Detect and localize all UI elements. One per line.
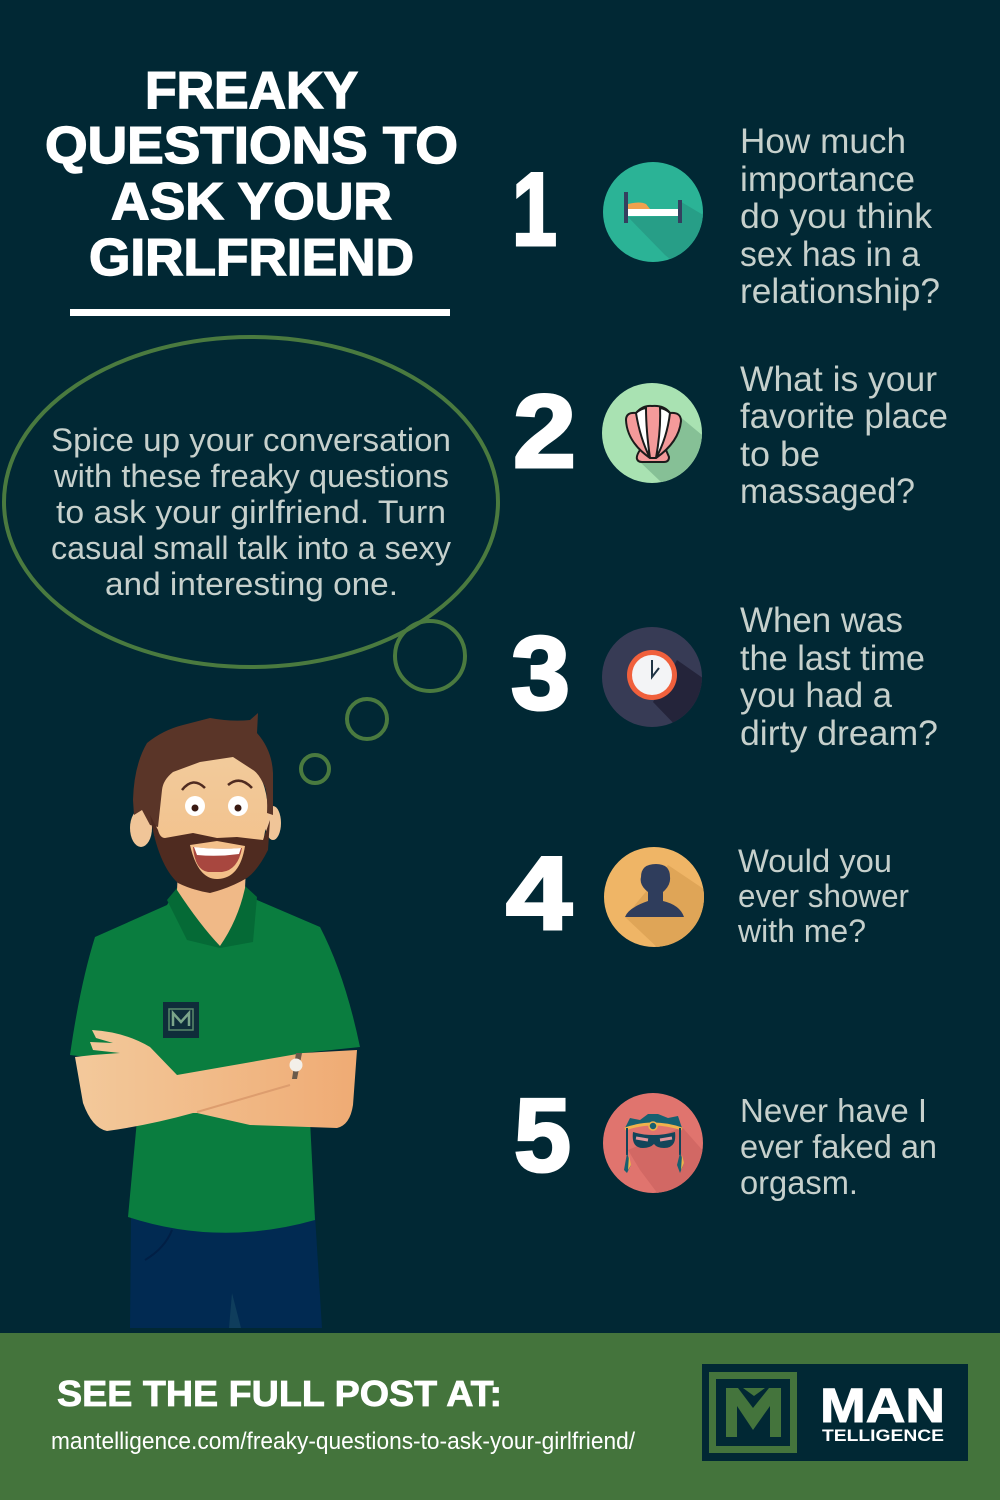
question 3 — [740, 601, 938, 753]
intro text — [51, 422, 451, 602]
question 3: you had a — [740, 676, 893, 715]
hair — [133, 713, 273, 827]
number 2: 2 — [513, 374, 576, 490]
chest badge — [163, 1002, 199, 1038]
item 3 — [511, 601, 938, 753]
title underline — [70, 309, 450, 316]
icon: mask — [603, 1093, 703, 1193]
question 1: sex has in a — [740, 235, 921, 274]
item 4 — [506, 847, 908, 947]
item 2 — [513, 360, 948, 511]
shirt — [70, 888, 360, 1233]
question 1: relationship? — [740, 272, 940, 311]
mouth — [190, 841, 245, 879]
logo: TELLIGENCE — [822, 1426, 944, 1445]
intro text: to ask your girlfriend. Turn — [56, 494, 446, 530]
question 5: orgasm. — [740, 1164, 858, 1201]
question 5 — [740, 1092, 937, 1201]
eyebrows — [182, 781, 252, 790]
question 2: massaged? — [740, 472, 915, 511]
arm crease — [197, 1085, 290, 1112]
number 1: 1 — [512, 152, 557, 268]
question 1 — [740, 122, 940, 311]
thought bubble — [4, 337, 498, 783]
item 1 — [512, 122, 940, 311]
wristwatch — [290, 1053, 302, 1079]
title — [45, 62, 458, 287]
question 3: When was — [740, 601, 903, 640]
question 2 — [740, 360, 948, 511]
question 2: What is your — [740, 360, 937, 399]
title: ASK YOUR — [111, 173, 392, 231]
trousers — [130, 1215, 322, 1328]
question 1: importance — [740, 160, 915, 199]
eyes — [185, 796, 248, 816]
number 3: 3 — [511, 616, 570, 732]
question 2: to be — [740, 435, 820, 474]
question 5: Never have I — [740, 1092, 927, 1129]
question 4: ever shower — [738, 878, 909, 914]
beard — [150, 815, 270, 893]
crossed arms — [75, 1030, 357, 1131]
question 4 — [737, 843, 909, 949]
icon: bed — [603, 162, 703, 262]
question 4: Would you — [738, 843, 892, 879]
intro text: casual small talk into a sexy — [51, 530, 451, 566]
intro text: with these freaky questions — [53, 458, 449, 494]
item 5 — [515, 1093, 935, 1201]
question 3: dirty dream? — [740, 714, 938, 753]
question 1: do you think — [740, 197, 932, 236]
face — [154, 750, 268, 872]
neck — [177, 868, 246, 946]
footer heading: SEE THE FULL POST AT: — [57, 1373, 502, 1414]
title: FREAKY — [145, 62, 358, 120]
title: GIRLFRIEND — [89, 229, 414, 287]
question 1: How much — [740, 122, 906, 161]
icon: shell — [602, 383, 702, 483]
character illustration — [70, 713, 360, 1328]
collar — [167, 886, 257, 948]
logo: MAN — [820, 1380, 945, 1433]
number 4: 4 — [506, 836, 572, 952]
question 5: ever faked an — [740, 1128, 937, 1165]
question 3: the last time — [740, 639, 925, 678]
intro text: Spice up your conversation — [51, 422, 451, 458]
number 5: 5 — [514, 1078, 571, 1194]
question 2: favorite place — [740, 397, 948, 436]
icon: person — [604, 847, 704, 947]
icon: clock — [602, 627, 702, 727]
ears — [130, 806, 281, 847]
footer band — [0, 1333, 1000, 1500]
title: QUESTIONS TO — [45, 117, 458, 175]
intro text: and interesting one. — [105, 566, 398, 602]
question 4: with me? — [737, 913, 866, 949]
footer url: mantelligence.com/freaky-questions-to-ask-your-girlfriend/ — [51, 1428, 635, 1455]
logo — [702, 1364, 968, 1461]
